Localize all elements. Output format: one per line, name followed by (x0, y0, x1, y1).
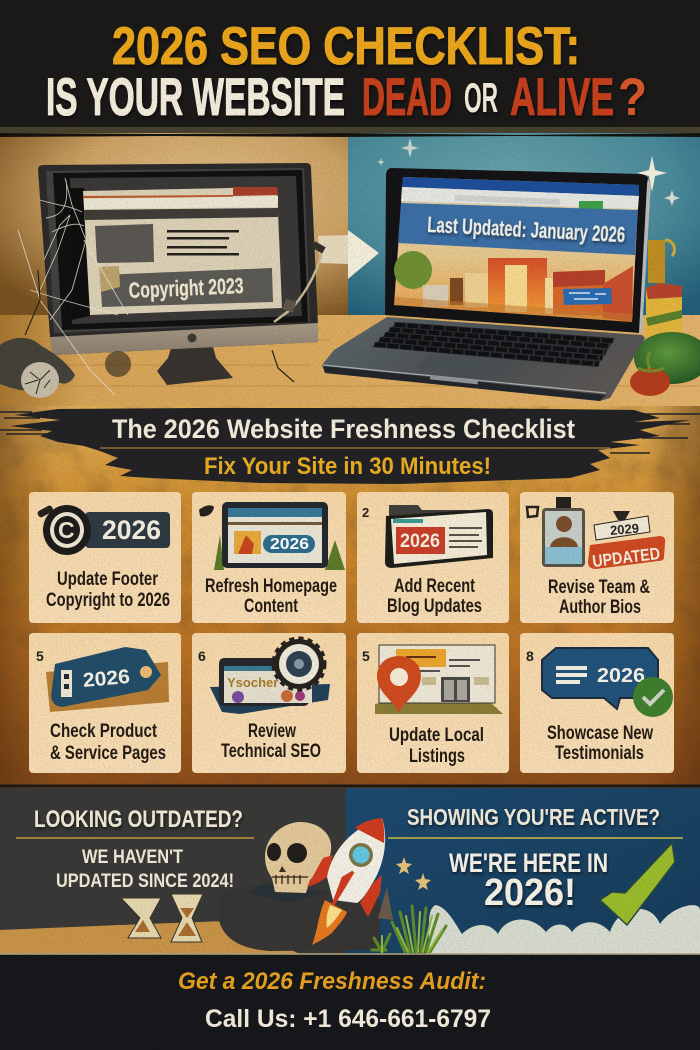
card label: Content (244, 596, 299, 617)
icon: speech bubble with check (526, 648, 673, 717)
panel: looking outdated (0, 786, 700, 954)
icon: copyright badge: C (58, 517, 75, 543)
title: DEAD (362, 68, 452, 127)
icon: blog folder: 2 (362, 505, 369, 520)
icon: rocket (307, 818, 385, 945)
outdated message: UPDATED SINCE 2024! (56, 871, 234, 892)
panel: showing active (0, 786, 700, 954)
icon: storefront with map pin: 5 (362, 648, 370, 664)
active message: 2026! (484, 872, 576, 914)
icon: blog folder (362, 505, 493, 568)
icon: speech bubble with check: 8 (526, 648, 534, 664)
icon: storefront with map pin (362, 645, 503, 714)
title: ? (618, 68, 647, 127)
card 2: refresh homepage (192, 492, 346, 623)
icon: price tag: 2026 (82, 666, 131, 692)
icon: black radio box (218, 884, 380, 951)
card label: Review (248, 721, 296, 742)
footer background (0, 954, 700, 1050)
illustration: skull and rocket (218, 818, 446, 952)
outdated heading: LOOKING OUTDATED? (34, 806, 243, 833)
panel: checklist background (0, 406, 700, 788)
card 6: technical SEO (192, 633, 346, 773)
icon: price tag (36, 647, 169, 712)
title: OR (464, 74, 498, 121)
active message (449, 848, 608, 914)
card label: Testimonials (555, 743, 644, 764)
card 8: testimonials (520, 633, 674, 773)
card label (205, 576, 337, 617)
icon: tomato (630, 352, 670, 396)
icon: tablet with homepage (199, 502, 345, 570)
icon: green check (600, 843, 675, 925)
copyright 2023 text: Copyright 2023 (128, 273, 244, 303)
icon: tablet with gear (198, 639, 330, 714)
card label: & Service Pages (50, 743, 166, 764)
card label: Blog Updates (387, 596, 482, 617)
card label (50, 721, 166, 764)
icon: speech bubble with check: 2026 (597, 665, 645, 687)
icon: ID badge and updated ribbon: UPDATED (591, 544, 661, 571)
cobwebs (18, 178, 128, 395)
card label (221, 721, 321, 762)
icon: gift boxes (646, 240, 682, 338)
icon: transition arrow (318, 235, 348, 264)
card label: Technical SEO (221, 741, 321, 762)
checklist heading text: The 2026 Website Freshness Checklist (112, 414, 575, 444)
icon: price tag: 5 (36, 648, 44, 664)
card label (387, 576, 482, 617)
card label (548, 577, 650, 618)
checklist subheading: Fix Your Site in 30 Minutes! (204, 453, 491, 480)
card label (547, 723, 653, 764)
card label: Refresh Homepage (205, 576, 337, 597)
icon: modern laptop (322, 168, 651, 401)
icon: clouds (428, 905, 700, 954)
card label: Revise Team & (548, 577, 650, 598)
icon: copyright badge: 2026 (102, 515, 161, 545)
footer call to action: Get a 2026 Freshness Audit: (178, 968, 486, 995)
icon: hourglasses (121, 894, 203, 942)
card label: Update Footer (57, 569, 158, 590)
card label: Update Local (389, 725, 484, 746)
icon: star (248, 900, 262, 914)
icon: old dusty monitor (18, 163, 326, 395)
card 5: product pages (29, 633, 181, 773)
title (46, 17, 647, 127)
card 3: add blog updates (357, 492, 509, 623)
card 7: local listings (357, 633, 509, 773)
header background (0, 0, 700, 132)
icon: tablet with gear: Ysocher (227, 675, 278, 690)
icon: dead plant (378, 887, 393, 920)
panel: hero dead vs alive (0, 127, 700, 408)
card label: Showcase New (547, 723, 653, 744)
icon: copyright badge (37, 505, 170, 555)
card label: Copyright to 2026 (46, 590, 170, 611)
icon: green fern (372, 906, 446, 952)
icon: tablet with gear: 6 (198, 648, 206, 664)
heading band (0, 408, 700, 484)
card label: Listings (409, 746, 465, 767)
outdated message: WE HAVEN'T (82, 847, 183, 868)
title: 2026 SEO CHECKLIST: (112, 17, 580, 76)
card label: Author Bios (559, 597, 641, 618)
card label: Add Recent (394, 576, 476, 597)
title: IS YOUR WEBSITE (46, 68, 345, 127)
icon: ID badge and updated ribbon (527, 497, 665, 571)
icon: cracked skull egg and dead plants (0, 270, 294, 398)
card 4: revise bios (520, 492, 674, 623)
laptop screen (394, 177, 639, 322)
icon: skull (265, 822, 331, 893)
card label (389, 725, 484, 767)
title: ALIVE (510, 68, 614, 127)
icon: ID badge and updated ribbon: 2029 (609, 521, 640, 538)
card 1: update footer (29, 492, 181, 623)
icon: stars (396, 857, 431, 890)
card label (46, 569, 170, 611)
icon: green bush (634, 332, 700, 384)
icon: sparkles (377, 138, 680, 206)
outdated message (56, 847, 234, 892)
footer phone number: Call Us: +1 646-661-6797 (205, 1005, 491, 1033)
icon: blog folder: 2026 (400, 531, 440, 552)
card label: Check Product (50, 721, 158, 742)
old web page (83, 187, 282, 315)
icon: dangling cable (274, 250, 322, 322)
active message: WE'RE HERE IN (449, 848, 608, 878)
icon: tablet with homepage: 2026 (270, 536, 309, 553)
